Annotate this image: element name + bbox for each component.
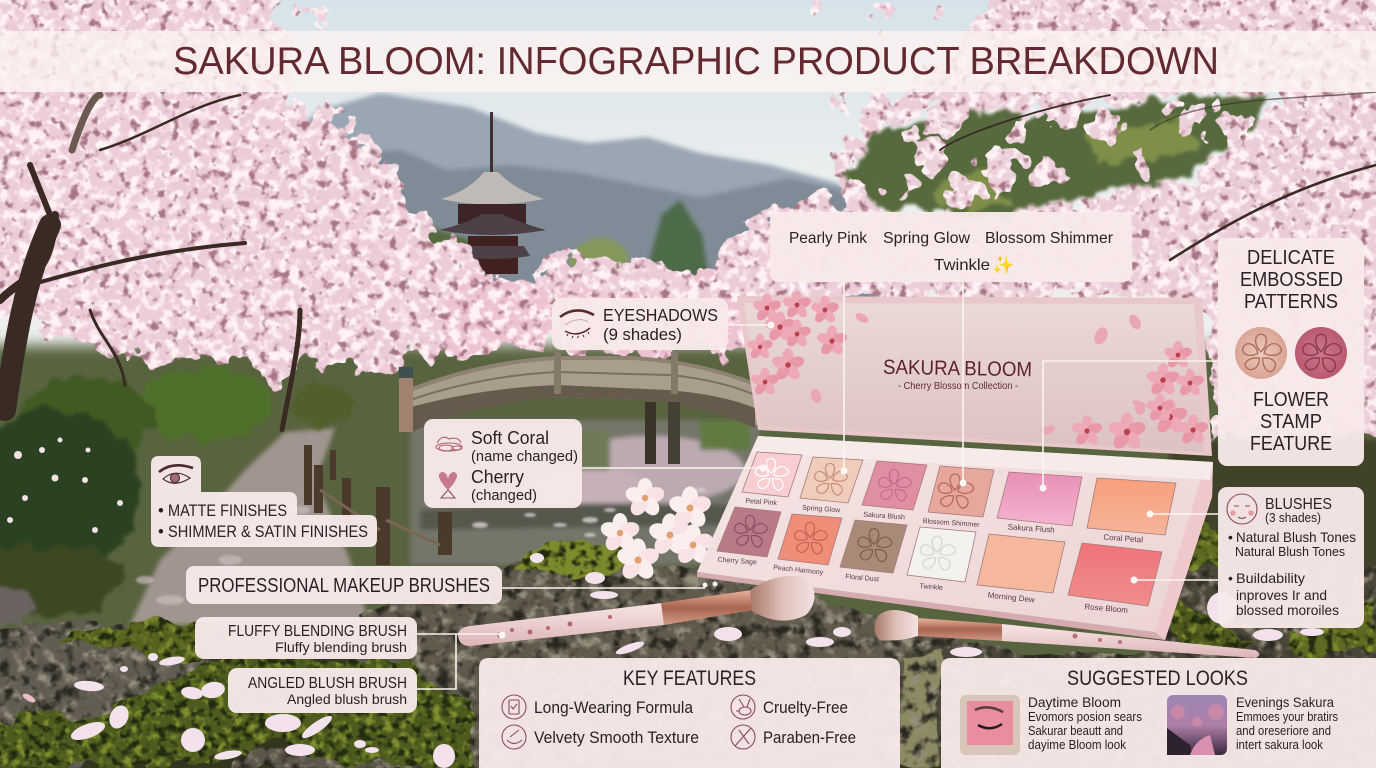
callout: soft coral and cherry: (changed) xyxy=(471,488,537,504)
panel: suggested looks: Daytime Bloom xyxy=(1028,694,1121,710)
panel: blushes: BLUSHES xyxy=(1265,496,1332,513)
callout: soft coral and cherry: Soft Coral xyxy=(471,428,549,448)
callout: soft coral and cherry: (name changed) xyxy=(471,449,578,465)
stone path xyxy=(130,428,370,625)
callout: angled blush brush: ANGLED BLUSH BRUSH xyxy=(248,675,407,692)
image: evening sakura xyxy=(1167,695,1227,755)
green hillside behind right tree xyxy=(845,92,1270,218)
pond sparkles xyxy=(472,488,706,537)
callout: shade names xyxy=(770,212,1132,282)
shade names: Rose Bloom xyxy=(1084,602,1129,615)
callout: finishes: • xyxy=(158,523,164,541)
callout: shade names: Twinkle xyxy=(934,257,990,274)
callout: eyeshadows xyxy=(552,298,728,350)
panel: suggested looks: Emmoes your bratirs xyxy=(1236,710,1338,724)
panel: blushes: Natural Blush Tones xyxy=(1235,544,1345,559)
shade names: Sakura Flush xyxy=(1007,522,1055,535)
right ground xyxy=(1150,440,1376,660)
embossed flowers on pans xyxy=(735,458,973,570)
shade names: Coral Petal xyxy=(1103,533,1143,544)
callout: finishes: SHIMMER & SATIN FINISHES xyxy=(168,523,368,541)
panel: suggested looks: Evomors posion sears xyxy=(1028,710,1142,724)
callout: eyeshadows: (9 shades) xyxy=(603,326,682,344)
callout: fluffy blending brush: Fluffy blending brush xyxy=(275,640,407,655)
panel: key features: Velvety Smooth Texture xyxy=(534,729,699,747)
icon: paraben-free xyxy=(731,725,755,749)
callout: fluffy blending brush: FLUFFY BLENDING BRUSH xyxy=(228,623,407,640)
shade names: Sakura Blush xyxy=(863,512,905,521)
panel: blushes: blossed moroiles xyxy=(1236,602,1339,618)
panel: embossed patterns xyxy=(1218,238,1364,466)
pagoda xyxy=(440,112,546,274)
panel: embossed patterns: PATTERNS xyxy=(1244,290,1338,313)
bridge xyxy=(399,352,757,464)
rock xyxy=(0,554,1376,768)
pond xyxy=(410,420,760,565)
callout: soft coral and cherry xyxy=(424,419,582,508)
panel: blushes: Buildability xyxy=(1236,570,1305,586)
panel: embossed patterns: FLOWER xyxy=(1253,388,1329,411)
blossom clumps right xyxy=(807,3,1253,209)
shade names: Blossom Shimmer xyxy=(923,518,980,529)
icon: long-wearing xyxy=(502,695,526,719)
callout: shade names: Blossom Shimmer xyxy=(985,230,1114,247)
ground greenery xyxy=(0,345,1376,675)
speckled moss right xyxy=(900,655,942,768)
panel: blushes: inproves Ir and xyxy=(1236,587,1327,603)
dark foreground base xyxy=(0,655,1376,768)
icon: velvety texture xyxy=(502,725,526,749)
shade names: Floral Dust xyxy=(845,574,879,583)
panel: suggested looks xyxy=(941,658,1376,768)
swatch: rose flower stamp xyxy=(1295,327,1347,379)
panel: blushes: Natural Blush Tones xyxy=(1236,529,1356,545)
title band: SAKURA BLOOM: INFOGRAPHIC PRODUCT BREAKDOWN xyxy=(173,40,1219,83)
panel: key features: Cruelty-Free xyxy=(763,699,848,717)
icon: closed eye xyxy=(560,310,594,338)
fluffy blending brush xyxy=(458,576,815,646)
blossom left xyxy=(0,0,860,380)
tree branches xyxy=(0,92,1376,430)
panel: blushes: (3 shades) xyxy=(1265,510,1321,525)
callout: finishes: • xyxy=(158,502,164,520)
icon: cherry heart xyxy=(439,472,457,498)
panel: key features xyxy=(479,658,900,768)
panel: suggested looks: dayime Bloom look xyxy=(1028,738,1127,752)
palette base xyxy=(697,436,1213,640)
panel: blushes xyxy=(1218,487,1364,628)
fence xyxy=(304,445,452,565)
panel: embossed patterns: EMBOSSED xyxy=(1240,268,1343,291)
callout: soft coral and cherry: Cherry xyxy=(471,467,524,487)
shade names xyxy=(717,498,1143,615)
callout: professional makeup brushes xyxy=(186,566,502,604)
palette lid xyxy=(737,291,1212,456)
icon: blushing face xyxy=(1227,494,1257,524)
callout: professional makeup brushes: PROFESSIONAL MAKEUP BRUSHES xyxy=(198,575,490,597)
panel: suggested looks: Sakurar beautt and xyxy=(1028,724,1123,738)
panel: suggested looks: SUGGESTED LOOKS xyxy=(1067,667,1248,690)
panel: suggested looks: Evenings Sakura xyxy=(1236,694,1334,710)
panel: embossed patterns: DELICATE xyxy=(1247,246,1335,269)
swatch: light flower stamp xyxy=(1235,327,1287,379)
icon: cruelty-free xyxy=(731,695,755,719)
fallen petals xyxy=(21,553,1324,768)
shade names: Peach Harmony xyxy=(773,564,824,577)
panel: key features: Long-Wearing Formula xyxy=(534,699,694,717)
callout: shade names: ✨ xyxy=(992,255,1014,275)
panel: key features: Paraben-Free xyxy=(763,729,856,747)
shade names: Twinkle xyxy=(919,583,943,592)
panel: key features: KEY FEATURES xyxy=(623,667,756,690)
makeup palette xyxy=(697,291,1213,640)
blossom clumps left xyxy=(304,9,398,178)
panel: embossed patterns: STAMP xyxy=(1260,410,1322,433)
callout: eyeshadows: EYESHADOWS xyxy=(603,305,718,325)
callout: finishes: MATTE FINISHES xyxy=(168,502,287,520)
title band xyxy=(0,31,1376,92)
icon: eye xyxy=(159,465,193,483)
callout: fluffy blending brush xyxy=(195,617,417,659)
mountains xyxy=(270,93,880,300)
panel: suggested looks: and oreseriore and xyxy=(1236,724,1331,738)
connector lines xyxy=(417,282,1218,689)
eyeshadow and blush pans xyxy=(717,452,1176,606)
shade names: Spring Glow xyxy=(802,505,841,514)
palette lid: SAKURA BLOOM xyxy=(883,356,1032,381)
callout: shade names: Spring Glow xyxy=(883,230,970,247)
far trees xyxy=(420,200,710,300)
callout: angled blush brush xyxy=(228,668,417,713)
callout: finishes xyxy=(151,456,377,547)
callout: angled blush brush: Angled blush brush xyxy=(287,692,407,707)
bush flowers xyxy=(7,438,123,533)
panel: blushes: • xyxy=(1228,529,1233,545)
blossom right xyxy=(778,0,1376,440)
icon: coral swatch xyxy=(436,437,462,451)
shade names: Cherry Sage xyxy=(717,557,757,566)
white blossom sprig xyxy=(599,478,715,582)
bushes xyxy=(0,369,352,625)
panel: blushes: • xyxy=(1228,570,1233,586)
shade names: Morning Dew xyxy=(987,591,1035,604)
moss xyxy=(0,519,1376,768)
palette lid: - Cherry Blossom Collection - xyxy=(898,381,1018,392)
angled blush brush xyxy=(874,610,1259,658)
image: daytime eye xyxy=(960,695,1020,755)
panel: suggested looks: intert sakura look xyxy=(1236,738,1324,752)
shade names: Petal Pink xyxy=(745,498,778,507)
callout: shade names: Pearly Pink xyxy=(789,230,868,247)
panel: embossed patterns: FEATURE xyxy=(1250,432,1332,455)
